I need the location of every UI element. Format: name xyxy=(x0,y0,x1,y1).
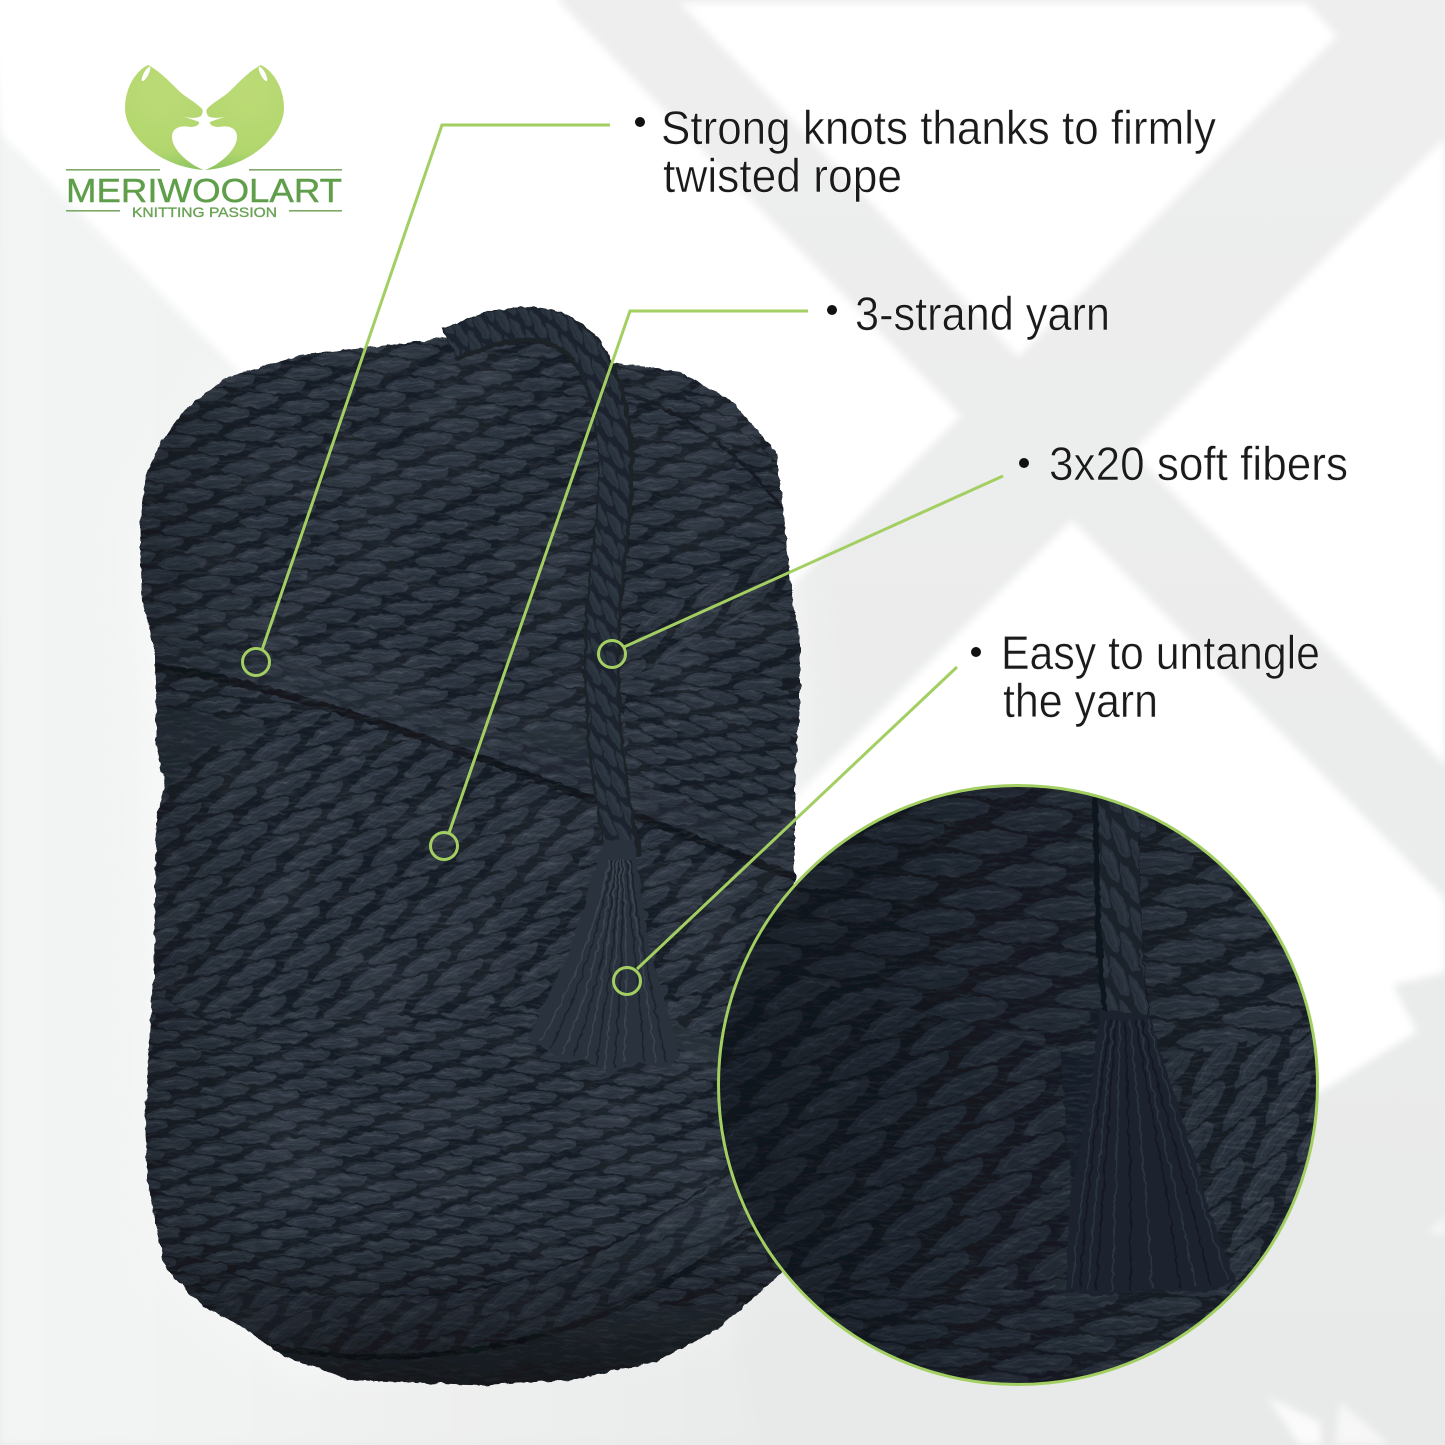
detail: braid xyxy=(1115,780,1128,1030)
yarn spool photo xyxy=(130,300,810,1400)
logo: Meriwoolart xyxy=(66,65,342,220)
strand: bottom thick rope xyxy=(215,1168,800,1328)
strand: crossing rope xyxy=(150,652,810,868)
spool: lower wraps xyxy=(130,1000,810,1330)
leader line and marker xyxy=(598,476,1003,668)
spool: upper wraps xyxy=(139,336,802,733)
leader line and marker xyxy=(430,311,808,860)
logo wordmark: MERIWOOLART xyxy=(66,172,342,209)
magnified detail circle xyxy=(717,784,1319,1386)
hanging yarn end with braid xyxy=(450,323,680,1076)
text: 3-strand yarn: 3-strand yarn xyxy=(855,287,1110,340)
callout: easy to untangle xyxy=(614,626,1333,994)
detail: tassel xyxy=(1066,1010,1236,1296)
text: strong knots: Strong knots thanks to firmly xyxy=(661,101,1216,154)
detail: left wraps xyxy=(720,963,1072,1291)
logo tagline: KNITTING PASSION xyxy=(132,204,277,220)
strand: rising right rope xyxy=(612,560,810,665)
spool: middle wraps xyxy=(152,712,795,1038)
text: easy to untangle: Easy to untangle xyxy=(1001,626,1320,679)
callout: soft fibers xyxy=(598,437,1348,668)
leader line and marker xyxy=(614,667,957,994)
text: easy to untangle: the yarn xyxy=(1003,674,1158,727)
spool: right-side wraps xyxy=(624,688,800,842)
text: strong knots: twisted rope xyxy=(663,149,902,202)
strand: top curved rope xyxy=(618,380,790,500)
detail: bottom wraps xyxy=(804,1289,1230,1383)
callout: strong knots xyxy=(242,101,1229,676)
detail: right wraps xyxy=(1163,1027,1316,1291)
text: soft fibers: 3x20 soft fibers xyxy=(1049,437,1348,490)
leader line and marker xyxy=(242,125,610,676)
logo icon: two sheep heads forming a heart xyxy=(125,65,284,170)
tassel xyxy=(528,840,680,1076)
detail: upper wraps xyxy=(746,787,1310,1058)
callout: 3-strand yarn xyxy=(430,287,1110,860)
